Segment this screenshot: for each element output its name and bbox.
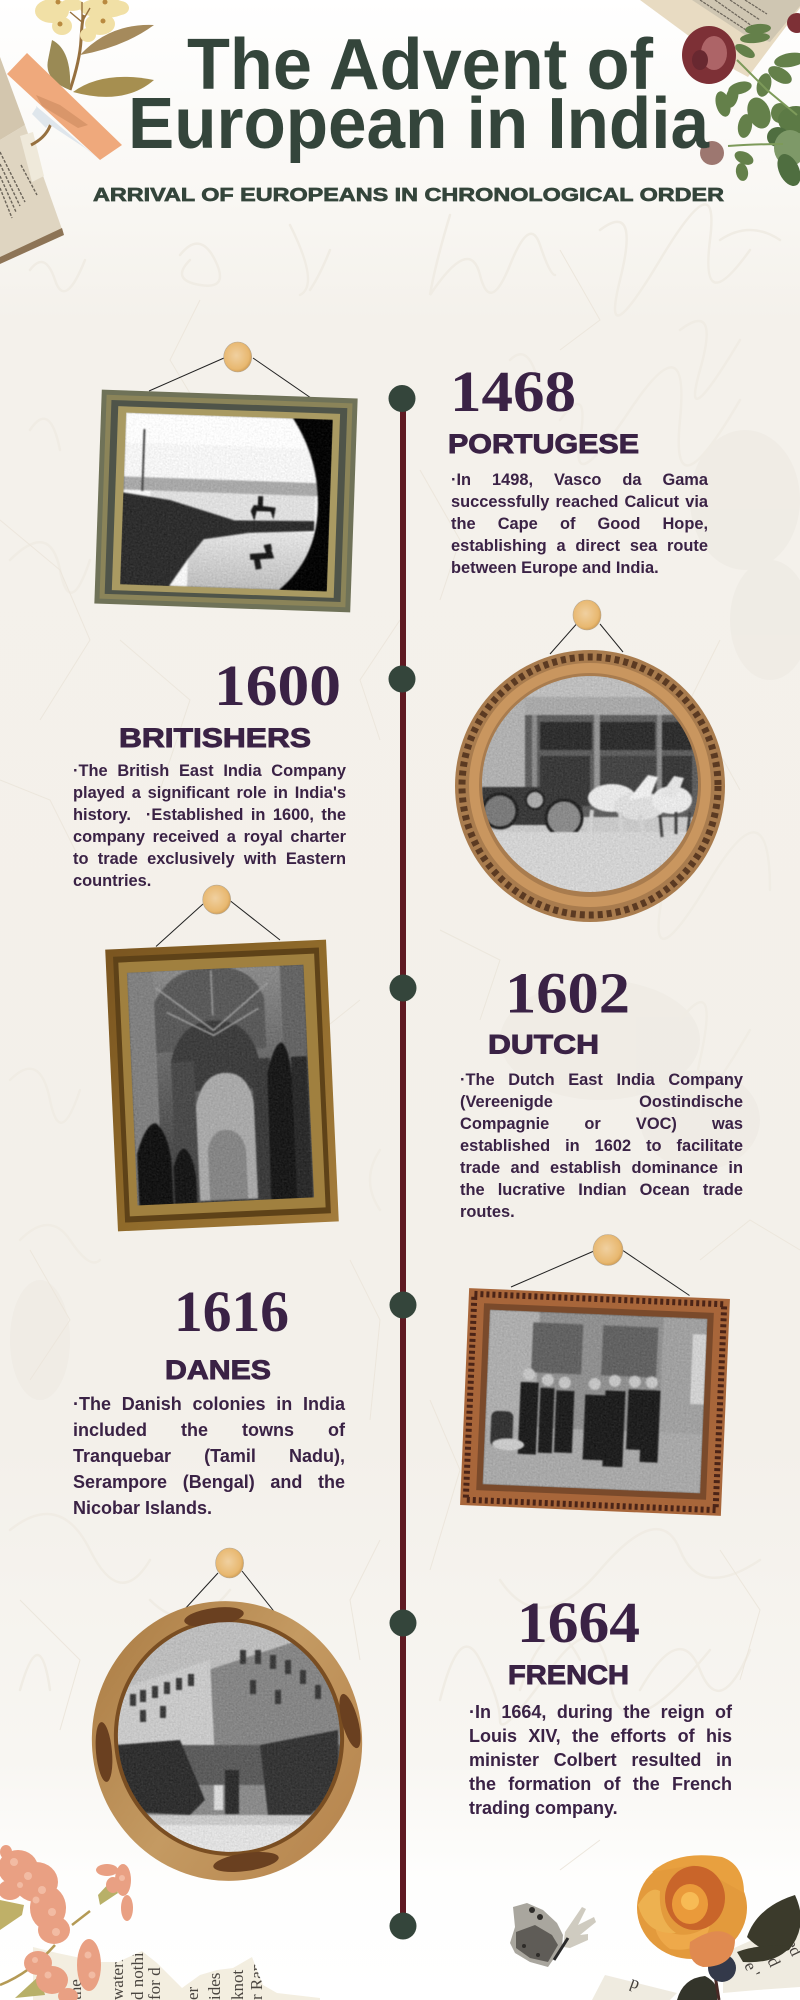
decoration: top-right book and roses [640, 0, 800, 190]
text block: Britishers: ·The British East India Company [73, 762, 346, 780]
text block: Dutch: Compagnie or VOC) was [460, 1115, 743, 1133]
text block: Portuguese: successfully reached Calicut via [451, 493, 708, 511]
rose bud [700, 141, 724, 165]
entry 1600 heading: BRITISHERS [119, 723, 311, 753]
tape [36, 106, 100, 160]
timeline dots [388, 385, 416, 1940]
frame [70, 1580, 384, 1902]
entry 1664 heading: 1664 [517, 1590, 640, 1655]
text block: Dutch: trade and establish dominance in [460, 1159, 743, 1177]
text block: Portuguese: between Europe and India. [451, 559, 659, 577]
entry 1600 heading [119, 653, 341, 753]
text block: Dutch [460, 1071, 743, 1221]
text block: Britishers: played a significant role in India's [73, 784, 346, 802]
text block: French: minister Colbert resulted in [469, 1750, 732, 1770]
leaves and stem [31, 15, 154, 145]
text block: Britishers: company received a royal charter [73, 828, 346, 846]
decoration: bottom-right rose, leaves, paper and butterfly: pod [756, 1939, 785, 1970]
entry 1616 heading: 1616 [174, 1279, 289, 1344]
entry 1616 heading: DANES [165, 1355, 271, 1385]
text block: Dutch: the lucrative Indian Ocean trade [460, 1181, 743, 1199]
entry 1602 heading: 1602 [505, 960, 630, 1026]
photo [482, 1310, 708, 1493]
book [640, 0, 800, 77]
pin [573, 600, 601, 630]
text block: Danes: ·The Danish colonies in India [73, 1394, 345, 1414]
text block: French: trading company. [469, 1798, 618, 1818]
butterfly [510, 1903, 596, 1967]
entry 1602 heading [488, 960, 630, 1060]
text block: French: ·In 1664, during the reign of [469, 1702, 732, 1722]
text block: Danes [73, 1394, 346, 1518]
decoration: bottom-right rose, leaves, paper and butterfly: e ' [740, 1959, 764, 1980]
paper text: er [183, 1986, 202, 2000]
framed picture 4: men in a drawing room [460, 1234, 730, 1516]
book [0, 57, 64, 264]
hanging strings [149, 358, 311, 398]
torn paper [33, 1947, 320, 2000]
decoration: bottom-left flowers and torn paper [0, 1845, 320, 2000]
text block: Dutch: routes. [460, 1203, 515, 1221]
text block: Britishers [73, 762, 346, 890]
hanging strings [511, 1251, 690, 1296]
paper text: r Ran [247, 1962, 266, 2000]
frame ornaments [93, 1604, 365, 1876]
text block: Britishers: history. ·Established in 1600, the [73, 806, 346, 824]
framed picture 1: rider by the water [94, 342, 358, 612]
text block: Portuguese: ·In 1498, Vasco da Gama [451, 471, 708, 489]
decoration: bottom-right rose, leaves, paper and butterfly [510, 1855, 800, 2000]
entry 1468 heading: 1468 [450, 359, 576, 424]
title: European in India [128, 84, 710, 164]
orange rose [637, 1857, 747, 1959]
foliage [713, 23, 800, 190]
text block: Danes: Tranquebar (Tamil Nadu), [73, 1446, 345, 1466]
text block: Danes: Nicobar Islands. [73, 1498, 212, 1518]
flower cluster [35, 0, 129, 42]
photo [120, 412, 333, 592]
photo [118, 1622, 340, 1852]
text block: Portuguese: the Cape of Good Hope, [451, 515, 708, 533]
entry 1664 heading [508, 1590, 640, 1690]
framed picture 5: crowd scene engraving [92, 1548, 362, 1881]
decoration: bottom-right rose, leaves, paper and butterfly: d [626, 1975, 641, 1996]
frame [105, 940, 339, 1231]
photo [480, 675, 700, 895]
coral flower clusters [0, 1845, 133, 2000]
title [128, 25, 710, 164]
text block: French: Louis XIV, the efforts of his [469, 1726, 732, 1746]
paper text: the [66, 1979, 85, 2000]
entry 1616 heading [165, 1279, 289, 1385]
text block: French: the formation of the French [469, 1774, 732, 1794]
frame [455, 650, 725, 922]
text block: French [469, 1702, 732, 1818]
paper text: for d [145, 1967, 164, 2000]
text block: Britishers: to trade exclusively with Eastern [73, 850, 346, 868]
subtitle: ARRIVAL OF EUROPEANS IN CHRONOLOGICAL ORDER [93, 184, 725, 205]
framed picture 2: horse-drawn fire engine [455, 600, 725, 922]
paper text [66, 1952, 266, 2000]
frame [460, 1288, 730, 1516]
hanging strings [156, 901, 280, 946]
stems [0, 1911, 90, 1985]
text block: Dutch: established in 1602 to facilitate [460, 1137, 743, 1155]
pin [224, 342, 252, 372]
title: The Advent of [187, 25, 654, 105]
paper text: ides [205, 1973, 224, 2000]
paper text: waterf [108, 1956, 127, 2000]
pin [593, 1234, 623, 1266]
text block: Dutch: (Vereenigde Oostindische [460, 1093, 743, 1111]
frame [94, 390, 358, 612]
entry 1600 heading: 1600 [214, 653, 341, 718]
text block: Britishers: countries. [73, 872, 151, 890]
pin [216, 1548, 244, 1578]
entry 1664 heading: FRENCH [508, 1660, 629, 1690]
text block: Danes: included the towns of [73, 1420, 345, 1440]
entry 1468 heading [448, 359, 639, 459]
entry 1468 heading: PORTUGESE [448, 429, 639, 459]
pin [203, 885, 231, 914]
text block: Portuguese: establishing a direct sea route [451, 537, 708, 555]
entry 1602 heading: DUTCH [488, 1030, 599, 1060]
dark leaves [747, 1895, 800, 1952]
timeline line [400, 398, 406, 1926]
decoration: top-left book, tape and pressed flower [0, 0, 154, 264]
text block: Danes: Serampore (Bengal) and the [73, 1472, 345, 1492]
paper text: d nothi [128, 1952, 147, 2000]
hanging strings [184, 1571, 274, 1612]
text block: Portuguese [451, 471, 708, 577]
photo [127, 964, 314, 1206]
paper strips [723, 1922, 800, 1993]
hanging strings [550, 624, 623, 654]
paper text: knot [228, 1970, 247, 2000]
framed picture 3: cathedral nave [105, 885, 339, 1231]
timeline [388, 385, 416, 1940]
red rose [682, 26, 736, 84]
text block: Dutch: ·The Dutch East India Company [460, 1071, 743, 1089]
